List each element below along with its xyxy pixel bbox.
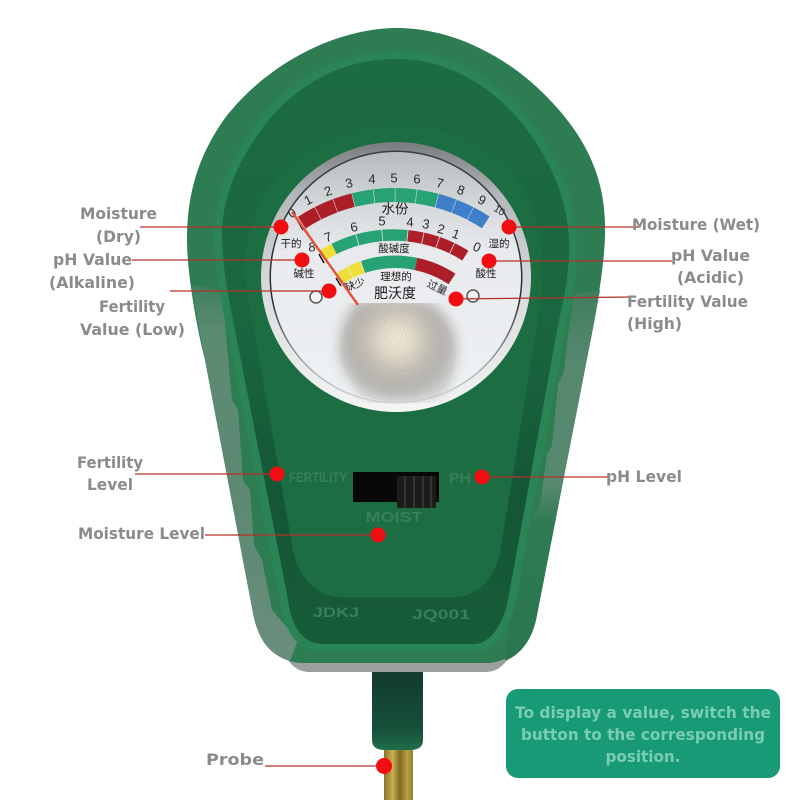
- MOIST marking: MOIST: [366, 509, 422, 526]
- instruction note: [506, 689, 780, 778]
- dial ring: [270, 150, 522, 404]
- callout: fertility level: Level: [87, 475, 133, 494]
- needle: [292, 212, 358, 305]
- moisture numbers: 0: [285, 205, 299, 221]
- callout: moisture dry: Moisture: [80, 204, 157, 223]
- dial Chinese labels: 缺少: [343, 275, 367, 294]
- moisture numbers: 8: [455, 182, 467, 198]
- fertility ideal band: [363, 262, 416, 267]
- dial Chinese labels: 湿的: [488, 237, 510, 250]
- dial Chinese labels: 水份: [382, 202, 409, 216]
- left adjust knob: [310, 291, 322, 303]
- pH acidic band: [408, 236, 466, 256]
- callout: pH level: pH Level: [606, 467, 682, 486]
- dial Chinese labels: 过量: [425, 277, 450, 298]
- moisture wet band: [437, 201, 486, 223]
- callout: probe: Probe: [206, 750, 264, 769]
- dial Chinese labels: 干的: [280, 237, 302, 250]
- body outer shell: [187, 28, 605, 663]
- band end ticks: [296, 218, 341, 286]
- callout: pH level: [474, 467, 682, 486]
- moisture numbers: 6: [413, 172, 421, 186]
- body inner channel with light rim: [218, 55, 573, 648]
- switch slot: [353, 472, 439, 502]
- moisture numbers: 4: [368, 172, 376, 186]
- dial Chinese labels: [280, 202, 510, 301]
- moisture ideal band: [354, 195, 437, 201]
- callout: moisture dry: [80, 204, 288, 246]
- dial bezel: [261, 142, 531, 412]
- moisture numbers: 1: [301, 192, 315, 208]
- instruction note: To display a value, switch the: [515, 703, 771, 722]
- pH numbers: 2: [436, 221, 446, 237]
- pH neutral band: [334, 235, 408, 249]
- callout: fertility high: [448, 292, 748, 333]
- callout: pH acidic: (Acidic): [677, 268, 744, 287]
- moisture scale: [302, 195, 486, 223]
- model text right: JQ001: [412, 606, 470, 622]
- dial face: [271, 152, 521, 402]
- callout: fertility level: Fertility: [77, 453, 144, 472]
- callout: fertility low: [80, 284, 336, 339]
- callout: fertility low: Fertility: [99, 297, 166, 316]
- dial Chinese labels: 肥沃度: [374, 285, 416, 301]
- right adjust knob: [467, 290, 479, 302]
- callout: fertility low: Value (Low): [80, 320, 185, 339]
- switch slider: [397, 476, 436, 508]
- dial Chinese labels: 酸性: [476, 267, 496, 280]
- pH numbers: 0: [471, 239, 483, 255]
- pH numbers: [308, 214, 483, 255]
- pH scale: [322, 235, 466, 256]
- callout: probe: [206, 750, 392, 774]
- dial surround and lower panel: [245, 126, 543, 597]
- callout: moisture dry: (Dry): [96, 227, 141, 246]
- pH numbers: 8: [308, 240, 316, 254]
- callout: pH alkaline: (Alkaline): [49, 273, 135, 292]
- metal probe: [384, 745, 413, 800]
- model text left: JDKJ: [313, 604, 359, 620]
- fertility low band: [339, 267, 363, 279]
- callout: moisture level: [78, 524, 386, 543]
- dial Chinese labels: 理想的: [380, 270, 412, 283]
- body underside shadow: [285, 655, 510, 672]
- callout: pH alkaline: pH Value: [53, 250, 132, 269]
- pH numbers: 7: [322, 229, 334, 245]
- moisture numbers: 9: [475, 192, 489, 208]
- dial Chinese labels: 碱性: [294, 267, 314, 280]
- FERTILITY marking: FERTILITY: [289, 469, 348, 485]
- moisture numbers: 5: [390, 170, 398, 186]
- callout: fertility high: (High): [627, 314, 682, 333]
- callout: pH acidic: [482, 246, 750, 287]
- moisture numbers: 2: [322, 183, 334, 199]
- callout: moisture level: Moisture Level: [78, 524, 205, 543]
- lens reflection: [338, 298, 458, 402]
- dial Chinese labels: 酸碱度: [378, 242, 410, 255]
- pH alkaline band: [322, 249, 334, 256]
- right grey side rim: [505, 290, 600, 661]
- left grey side rim: [191, 285, 298, 661]
- dial gauge: [261, 142, 531, 412]
- pH numbers: 1: [450, 226, 462, 242]
- pH numbers: 5: [378, 214, 386, 228]
- moisture numbers: 10: [491, 203, 507, 219]
- callout: pH acidic: pH Value: [671, 246, 750, 265]
- PH marking: PH: [449, 470, 471, 487]
- callout: fertility level: [77, 453, 284, 494]
- moisture numbers: [285, 170, 507, 221]
- moisture numbers: 3: [344, 175, 354, 191]
- pH numbers: 6: [349, 219, 359, 235]
- callout: moisture wet: Moisture (Wet): [632, 215, 760, 234]
- selector markings: [289, 469, 471, 526]
- callout: moisture wet: [502, 215, 760, 234]
- pH numbers: 3: [421, 216, 431, 232]
- pH numbers: 4: [406, 214, 414, 230]
- fertility scale: [339, 262, 452, 279]
- callout: fertility high: Fertility Value: [627, 292, 748, 311]
- callout: pH alkaline: [49, 250, 310, 292]
- probe collar: [372, 668, 423, 750]
- moisture numbers: 7: [435, 175, 445, 191]
- instruction note: position.: [606, 747, 680, 766]
- instruction note: button to the corresponding: [521, 725, 765, 744]
- fertility high band: [416, 264, 452, 279]
- meter body: [187, 28, 605, 672]
- moisture dry band: [302, 200, 354, 223]
